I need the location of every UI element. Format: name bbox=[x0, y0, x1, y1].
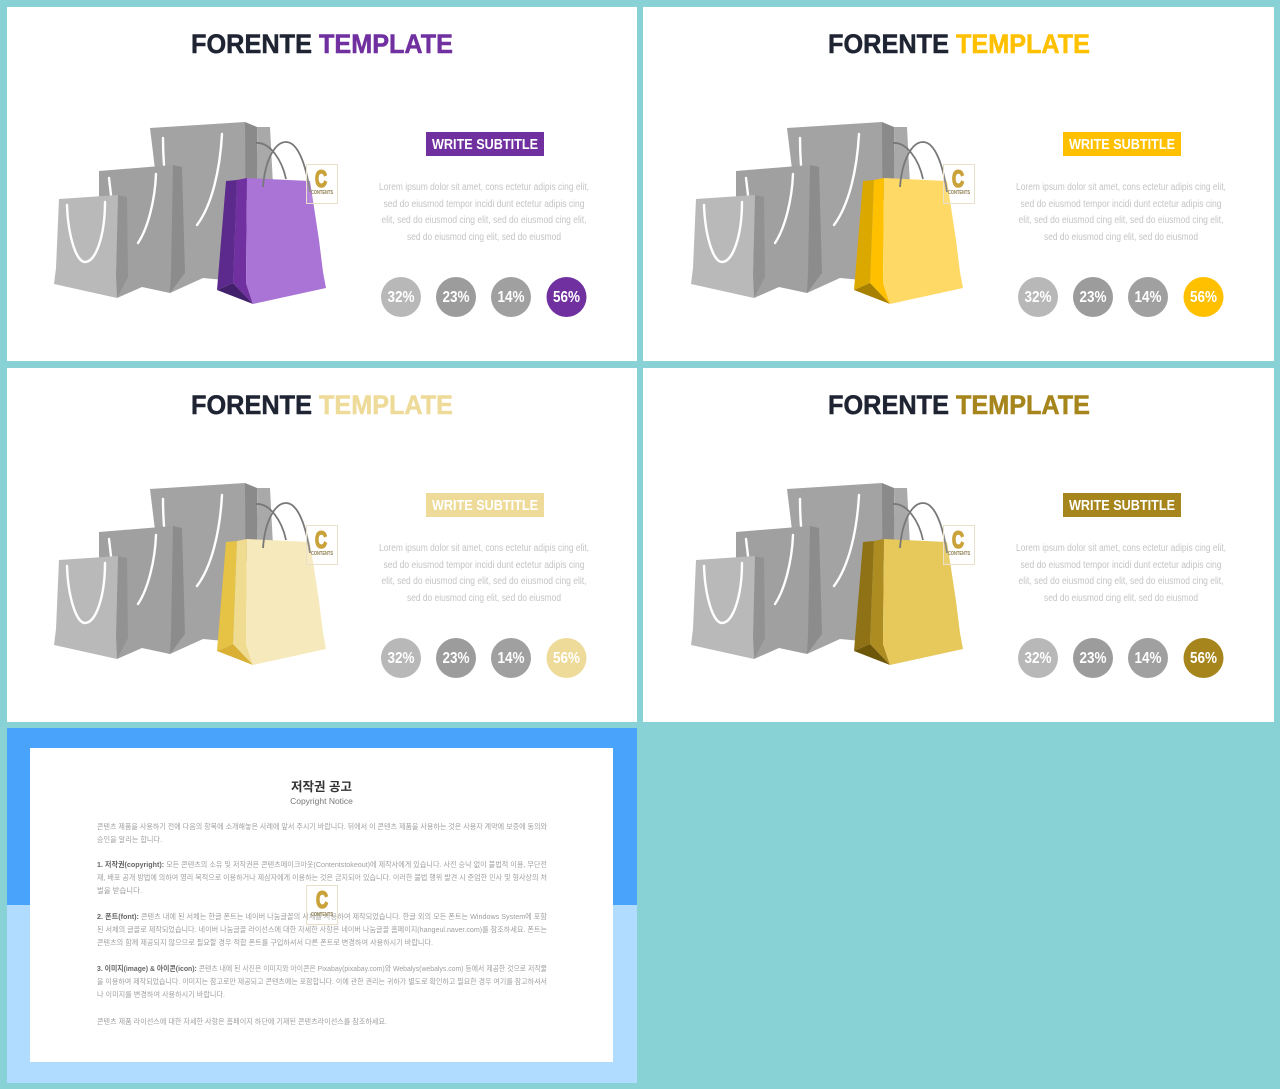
illustration: grey shopping bags bbox=[691, 122, 910, 298]
title bbox=[191, 29, 453, 59]
notice section 2: 된 서체의 글꼴로 제작되었습니다. 네이버 나눔글꼴 라이선스에 대한 자세한 사항은 네이버 나눔글꼴 홈페이지(hangeul.naver.com)를 참조하세요. 폰트는 bbox=[97, 924, 547, 934]
watermark bbox=[944, 164, 974, 204]
illustration: grey shopping bags bbox=[54, 483, 273, 659]
title bbox=[828, 29, 1090, 59]
percentage circles: 23% bbox=[1080, 289, 1107, 306]
notice section 3: 나 이미지를 변경하여 사용하시기 바랍니다. bbox=[97, 989, 225, 999]
body text: Lorem ipsum dolor sit amet, cons ectetur adipis cing elit, bbox=[379, 182, 589, 193]
notice section 1: 벌을 받습니다. bbox=[97, 885, 142, 895]
watermark bbox=[306, 526, 338, 564]
body text: elit, sed do eiusmod cing elit, sed do eiusmod cing elit, bbox=[1018, 215, 1224, 226]
illustration: grey shopping bags bbox=[54, 122, 273, 298]
percentage circles: 56% bbox=[1190, 650, 1217, 667]
title: FORENTE bbox=[828, 390, 949, 420]
percentage circles: 32% bbox=[388, 650, 415, 667]
title: TEMPLATE bbox=[956, 390, 1090, 420]
title: TEMPLATE bbox=[319, 390, 453, 420]
notice section 3: 3. 이미지(image) & 아이콘(icon): 콘텐츠 내에 된 사진은 이미지와 아이콘은 Pixabay(pixabay.com)와 Webalys(webalys.com) 등에서 제공한 것으로 저작물 bbox=[97, 963, 547, 973]
subtitle label bbox=[1063, 493, 1181, 517]
watermark: C bbox=[315, 166, 327, 193]
body text: sed do eiusmod tempor incidi dunt ectetur adipis cing bbox=[1020, 560, 1222, 571]
title: FORENTE bbox=[828, 29, 949, 59]
illustration: yellow bag bbox=[854, 142, 963, 304]
percentage circles bbox=[1018, 638, 1224, 678]
notice heading bbox=[290, 779, 353, 806]
watermark: C bbox=[952, 527, 964, 554]
subtitle label: WRITE SUBTITLE bbox=[432, 497, 538, 514]
body text: sed do eiusmod cing elit, sed do eiusmod bbox=[1044, 232, 1198, 243]
notice intro: 승인을 알리는 합니다. bbox=[97, 834, 162, 844]
subtitle label bbox=[426, 132, 544, 156]
notice closing line: 콘텐츠 제품 라이선스에 대한 자세한 사항은 홈페이지 하단에 기재된 콘텐츠라이선스를 참조하세요. bbox=[97, 1016, 387, 1026]
illustration: cream bag bbox=[217, 503, 326, 665]
notice section 3 bbox=[97, 963, 547, 999]
percentage circles: 14% bbox=[498, 650, 525, 667]
notice section 3: 을 이용하여 제작되었습니다. 이미지는 참고로만 제공되고 콘텐츠에는 포함합니다. 이에 관한 권리는 귀하가 별도로 확인하고 필요한 경우 여기를 참고하셔서 bbox=[97, 976, 547, 986]
blue header band bbox=[7, 728, 637, 905]
watermark bbox=[306, 164, 338, 204]
percentage circles: 56% bbox=[1190, 289, 1217, 306]
panel: olive gold slide bbox=[643, 368, 1274, 722]
body text bbox=[379, 543, 589, 604]
illustration: gold bag bbox=[854, 503, 963, 665]
watermark bbox=[944, 526, 974, 564]
body text bbox=[1016, 543, 1226, 604]
subtitle label bbox=[1063, 132, 1181, 156]
percentage circles: 23% bbox=[442, 289, 470, 306]
percentage circles: 56% bbox=[553, 289, 580, 306]
watermark: CONTENTS bbox=[311, 190, 333, 196]
subtitle label: WRITE SUBTITLE bbox=[1069, 136, 1175, 153]
body text: elit, sed do eiusmod cing elit, sed do eiusmod cing elit, bbox=[1018, 576, 1224, 587]
notice section 2 bbox=[97, 911, 547, 947]
percentage circles: 14% bbox=[498, 289, 525, 306]
percentage circles: 14% bbox=[1134, 289, 1162, 306]
percentage circles bbox=[381, 638, 586, 678]
percentage circles: 32% bbox=[1024, 650, 1052, 667]
percentage circles: 56% bbox=[553, 650, 580, 667]
body text: sed do eiusmod cing elit, sed do eiusmod bbox=[407, 232, 561, 243]
title bbox=[828, 390, 1090, 420]
body text: sed do eiusmod cing elit, sed do eiusmod bbox=[1044, 593, 1198, 604]
body text: sed do eiusmod tempor incidi dunt ectetur adipis cing bbox=[384, 560, 584, 571]
body text: sed do eiusmod tempor incidi dunt ectetur adipis cing bbox=[384, 199, 584, 210]
watermark: CONTENTS bbox=[948, 551, 970, 557]
percentage circles bbox=[381, 277, 586, 317]
subtitle label bbox=[426, 493, 544, 517]
percentage circles: 14% bbox=[1134, 650, 1162, 667]
body text bbox=[379, 182, 589, 243]
watermark: C bbox=[315, 527, 327, 554]
body text: elit, sed do eiusmod cing elit, sed do eiusmod cing elit, bbox=[382, 576, 586, 587]
watermark: C bbox=[952, 166, 964, 193]
percentage circles: 23% bbox=[442, 650, 470, 667]
percentage circles: 23% bbox=[1080, 650, 1107, 667]
body text: Lorem ipsum dolor sit amet, cons ectetur adipis cing elit, bbox=[1016, 543, 1226, 554]
watermark: CONTENTS bbox=[948, 190, 970, 196]
notice heading: 저작권 공고 bbox=[291, 779, 352, 794]
panel: cream slide bbox=[7, 368, 637, 722]
title: FORENTE bbox=[191, 29, 312, 59]
notice section 2: 2. 폰트(font): 콘텐츠 내에 된 서체는 한글 폰트는 네이버 나눔글꼴의 서체를 사용하여 제작되었습니다. 한글 외의 모든 폰트는 Windows System에 포함 bbox=[97, 911, 547, 921]
body text: Lorem ipsum dolor sit amet, cons ectetur adipis cing elit, bbox=[379, 543, 589, 554]
subtitle label: WRITE SUBTITLE bbox=[432, 136, 538, 153]
subtitle label: WRITE SUBTITLE bbox=[1069, 497, 1175, 514]
illustration: purple bag bbox=[217, 142, 326, 304]
watermark bbox=[306, 886, 338, 924]
watermark: C bbox=[316, 887, 328, 914]
title: TEMPLATE bbox=[956, 29, 1090, 59]
watermark: CONTENTS bbox=[311, 551, 333, 557]
body text: elit, sed do eiusmod cing elit, sed do eiusmod cing elit, bbox=[382, 215, 586, 226]
title: FORENTE bbox=[191, 390, 312, 420]
illustration: grey shopping bags bbox=[691, 483, 910, 659]
notice intro bbox=[97, 821, 547, 844]
notice section 1: 1. 저작권(copyright): 모든 콘텐츠의 소유 및 저작권은 콘텐츠메이크아웃(Contentstokeout)에 제작사에게 있습니다. 사전 승낙 없이 불법적 이용, 무단전 bbox=[97, 859, 547, 869]
body text: sed do eiusmod tempor incidi dunt ectetur adipis cing bbox=[1020, 199, 1222, 210]
watermark: CONTENTS bbox=[311, 912, 333, 918]
percentage circles: 32% bbox=[1024, 289, 1052, 306]
notice heading: Copyright Notice bbox=[290, 796, 353, 806]
body text: sed do eiusmod cing elit, sed do eiusmod bbox=[407, 593, 561, 604]
percentage circles: 32% bbox=[388, 289, 415, 306]
panel: copyright notice bbox=[7, 728, 637, 1083]
body text: Lorem ipsum dolor sit amet, cons ectetur adipis cing elit, bbox=[1016, 182, 1226, 193]
notice section 2: 콘텐츠의 함께 제공되지 않으므로 필요할 경우 적합 폰트를 구입하셔서 다른 폰트로 변경하여 사용하시기 바랍니다. bbox=[97, 937, 433, 947]
notice intro: 콘텐츠 제품을 사용하기 전에 다음의 항목에 소개해놓은 사례에 앞서 주시기 바랍니다. 뒤에서 이 콘텐츠 제품을 사용하는 것은 사용자 계약에 보증에 동의와 bbox=[97, 821, 547, 831]
panel: purple slide bbox=[7, 7, 637, 361]
notice section 1: 재, 배포 공개 방법에 의하여 영리 목적으로 이용하거나 제삼자에게 이용하는 것은 금지되어 있습니다. 이러한 불법 행위 발견 시 준엄한 민사 및 형사상의 처 bbox=[97, 872, 547, 882]
title: TEMPLATE bbox=[319, 29, 453, 59]
title bbox=[191, 390, 453, 420]
body text bbox=[1016, 182, 1226, 243]
panel: yellow slide bbox=[643, 7, 1274, 361]
white notice card bbox=[30, 748, 613, 1062]
notice section 1 bbox=[97, 859, 547, 895]
percentage circles bbox=[1018, 277, 1224, 317]
